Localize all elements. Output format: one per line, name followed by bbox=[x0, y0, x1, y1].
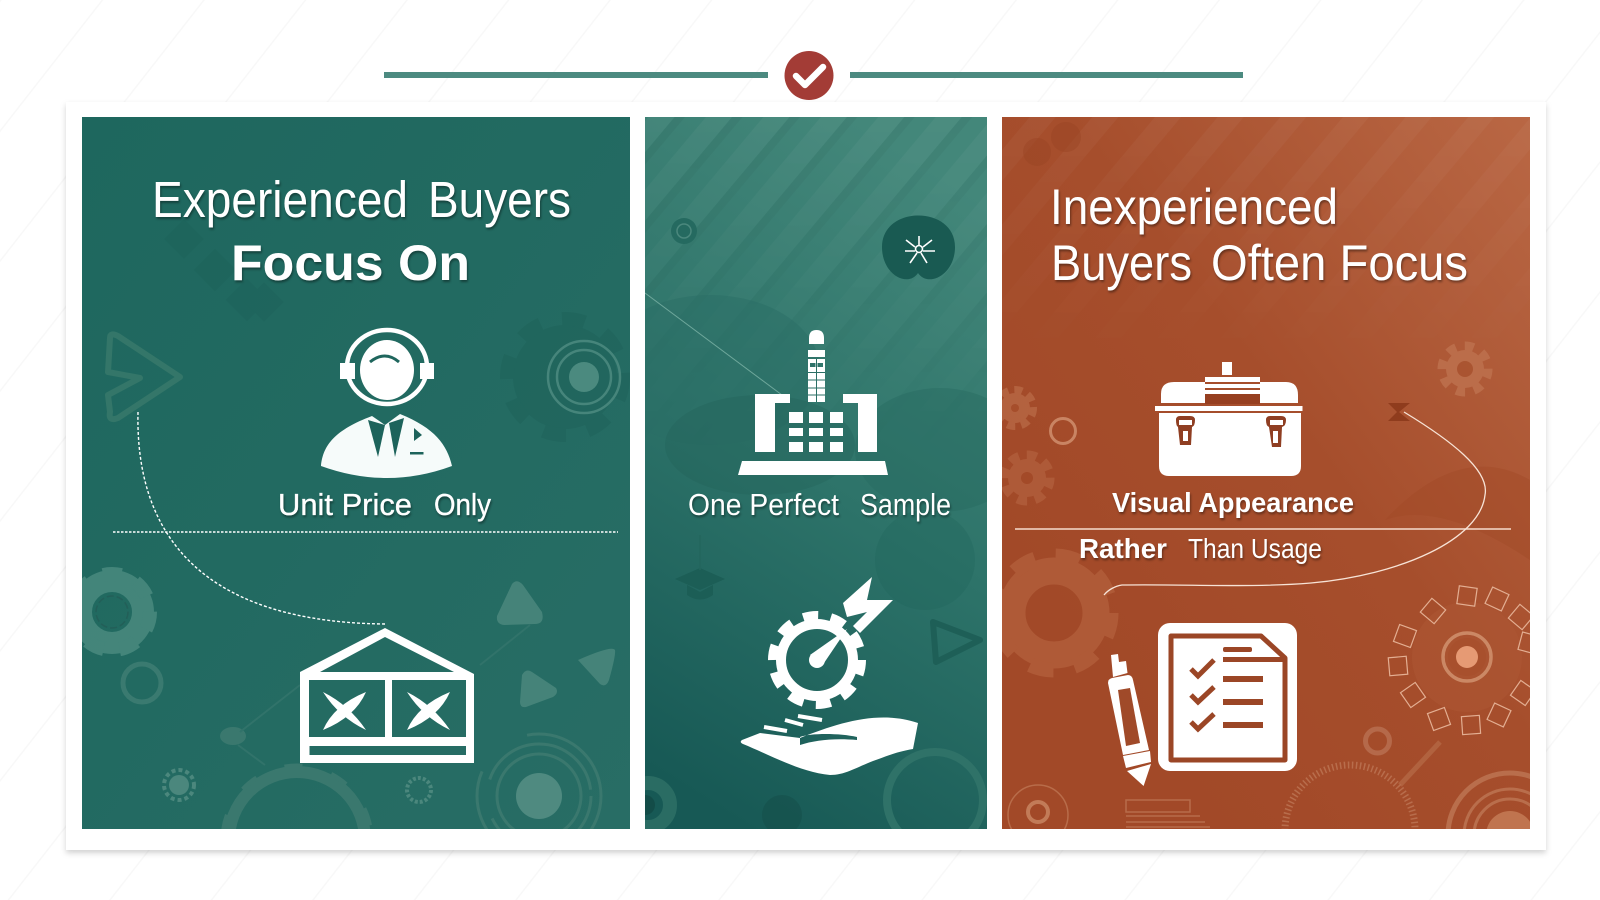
panel: experienced buyers bbox=[82, 117, 630, 829]
label: unit price only: Only bbox=[434, 487, 491, 522]
heading: inexperienced buyers often focus: Buyers bbox=[1051, 235, 1192, 291]
heading: experienced buyers focus on: Focus On bbox=[231, 235, 470, 291]
label: one perfect sample: Sample bbox=[860, 487, 951, 522]
panel 1 background motifs bbox=[74, 219, 623, 900]
label: rather than usage bbox=[1079, 533, 1322, 564]
white card bbox=[66, 102, 1546, 850]
label: visual appearance: Visual Appearance bbox=[1112, 487, 1354, 518]
panel 3 background motifs bbox=[1002, 342, 1530, 829]
heading: experienced buyers focus on bbox=[152, 171, 571, 291]
heading: inexperienced buyers often focus bbox=[1050, 179, 1468, 291]
icon: factory bbox=[738, 330, 888, 475]
label: unit price only bbox=[278, 487, 491, 522]
heading: inexperienced buyers often focus: Inexperienced bbox=[1050, 179, 1338, 235]
heading: inexperienced buyers often focus: Often Focus bbox=[1211, 235, 1468, 291]
icon: check badge bbox=[784, 51, 834, 100]
label: one perfect sample: One Perfect bbox=[688, 487, 839, 522]
label: rather than usage: Rather bbox=[1079, 533, 1167, 564]
panel: inexperienced buyers bbox=[1002, 117, 1530, 829]
heading: experienced buyers focus on: Experienced bbox=[152, 171, 408, 228]
header divider with check badge bbox=[384, 51, 1243, 100]
icon: pen bbox=[1108, 654, 1151, 786]
arrow: dashed connector bbox=[138, 412, 385, 624]
icon: gear and hand bbox=[741, 577, 918, 775]
icon: checklist bbox=[1158, 623, 1297, 771]
icon: person with headset bbox=[321, 330, 452, 478]
panel: one perfect sample bbox=[645, 117, 987, 829]
arrow: curved connector bbox=[1104, 403, 1485, 595]
icon: toolbox bbox=[1155, 362, 1302, 476]
label: one perfect sample bbox=[688, 487, 951, 522]
panel 2 background motifs bbox=[645, 216, 987, 829]
heading: experienced buyers focus on: Buyers bbox=[428, 171, 571, 228]
label: rather than usage: Than Usage bbox=[1188, 533, 1322, 564]
label: unit price only: Unit Price bbox=[278, 487, 412, 522]
icon: warehouse bbox=[300, 628, 474, 763]
